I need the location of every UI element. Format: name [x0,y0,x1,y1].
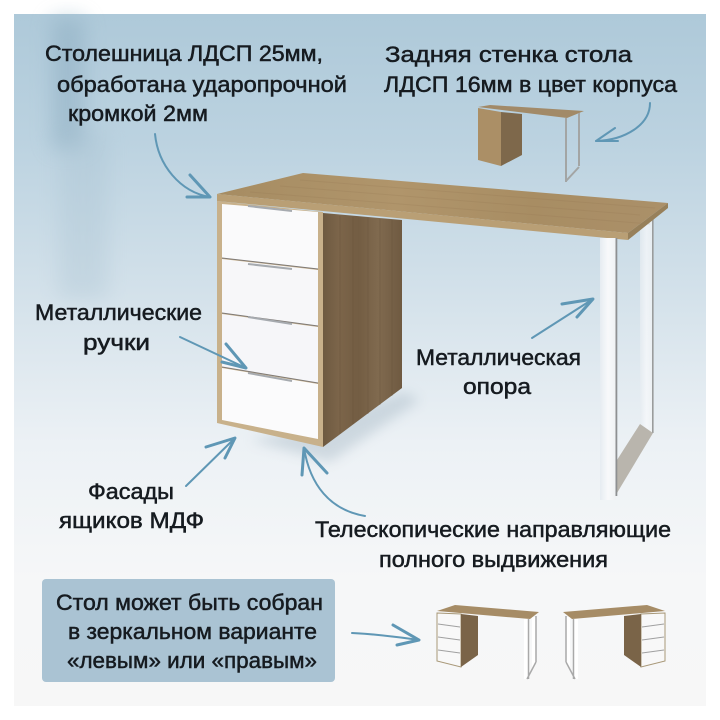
table top [217,173,668,240]
mirrored desk: right [563,605,665,679]
arrow: to metal leg [532,299,593,338]
arrow: to facades [186,438,235,486]
label: back wall [384,42,678,97]
mirrored desk: left [437,605,539,679]
label: telescopic rails: Телескопические направляющие [315,517,671,542]
label: telescopic rails: полного выдвижения [379,547,608,572]
carcass front frame [217,201,323,447]
label: table top [45,41,347,126]
drawer 1 [222,204,318,269]
small desk: rear view [478,105,584,182]
arrow: to small desk [596,103,650,141]
metal handles [248,206,292,381]
label: facades: Фасады [88,479,174,504]
callout panel [42,579,335,682]
drawer gaps [222,258,318,383]
drawer 2 [222,259,318,326]
label: handles: ручки [83,330,150,355]
arrow: to table top [155,134,210,197]
label: metal support: опора [463,374,532,399]
drawer 4 [222,368,318,439]
label: facades: ящиков МДФ [59,508,204,533]
callout panel: в зеркальном варианте [68,619,317,644]
main desk [217,173,668,500]
callout panel: «левым» или «правым» [67,648,317,673]
label: table top: кромкой 2мм [68,101,208,126]
arrow: to mirrored desks [352,625,419,645]
arrow: to rails [302,448,365,516]
arrow: to handles [180,337,246,368]
label: facades [59,479,204,533]
carcass side panel [323,213,402,447]
label: table top: обработана ударопрочной [57,72,347,97]
rear metal leg [617,219,654,493]
front metal leg [600,238,617,500]
label: back wall: ЛДСП 16мм в цвет корпуса [384,72,678,97]
label: back wall: Задняя стенка стола [385,42,633,67]
callout panel: Стол может быть собран [56,590,323,615]
label: metal support [416,345,581,399]
label: metal support: Металлическая [416,345,581,370]
label: handles [35,300,202,355]
label: telescopic rails [315,517,671,572]
drawer 3 [222,314,318,383]
label: handles: Металлические [35,300,202,325]
label: table top: Столешница ЛДСП 25мм, [45,41,323,66]
